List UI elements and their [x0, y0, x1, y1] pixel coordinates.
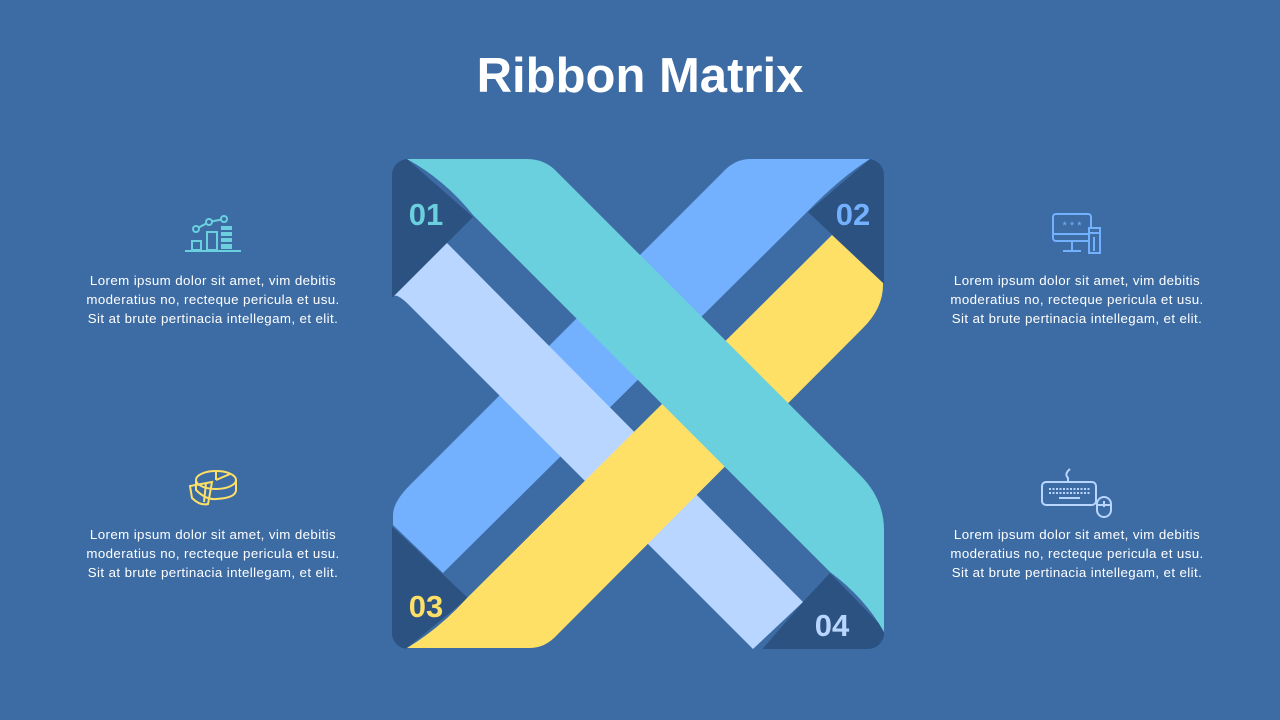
text block 03: Lorem ipsum dolor sit amet, vim debitis — [90, 527, 336, 542]
ribbon 03 yellow — [407, 235, 883, 648]
ribbon 02 blue — [393, 159, 870, 573]
text block 02: Sit at brute pertinacia intellegam, et elit. — [952, 311, 1202, 326]
icon: pie chart — [188, 470, 237, 506]
number 04: 04 — [815, 608, 850, 643]
text block 01 — [86, 273, 340, 326]
text block 03: moderatius no, recteque pericula et usu. — [86, 546, 340, 561]
corner 03 dark — [392, 526, 468, 648]
text block 01: Sit at brute pertinacia intellegam, et elit. — [88, 311, 338, 326]
number 01: 01 — [409, 197, 443, 232]
icon: keyboard and mouse — [1041, 468, 1112, 518]
text block 02: moderatius no, recteque pericula et usu. — [950, 292, 1204, 307]
corner 01 dark — [392, 159, 473, 298]
title: Ribbon Matrix — [477, 49, 803, 103]
ribbon 01 cyan — [407, 159, 884, 632]
text block 01: Lorem ipsum dolor sit amet, vim debitis — [90, 273, 336, 288]
icon: computer: * * * — [1063, 220, 1082, 232]
text block 04: Lorem ipsum dolor sit amet, vim debitis — [954, 527, 1200, 542]
text block 01: moderatius no, recteque pericula et usu. — [86, 292, 340, 307]
text block 03: Sit at brute pertinacia intellegam, et elit. — [88, 565, 338, 580]
icon: computer — [1052, 213, 1101, 254]
ribbon matrix diagram — [392, 159, 884, 649]
text block 04 — [950, 527, 1204, 580]
text block 02 — [950, 273, 1204, 326]
number 03: 03 — [409, 589, 443, 624]
corner 02 dark — [808, 159, 884, 284]
text block 04: Sit at brute pertinacia intellegam, et elit. — [952, 565, 1202, 580]
corner 04 dark — [762, 573, 884, 649]
text block 03 — [86, 527, 340, 580]
icon: bar chart — [185, 215, 241, 252]
text block 04: moderatius no, recteque pericula et usu. — [950, 546, 1204, 561]
number 02: 02 — [836, 197, 870, 232]
text block 02: Lorem ipsum dolor sit amet, vim debitis — [954, 273, 1200, 288]
ribbon 04 pale — [393, 243, 803, 649]
